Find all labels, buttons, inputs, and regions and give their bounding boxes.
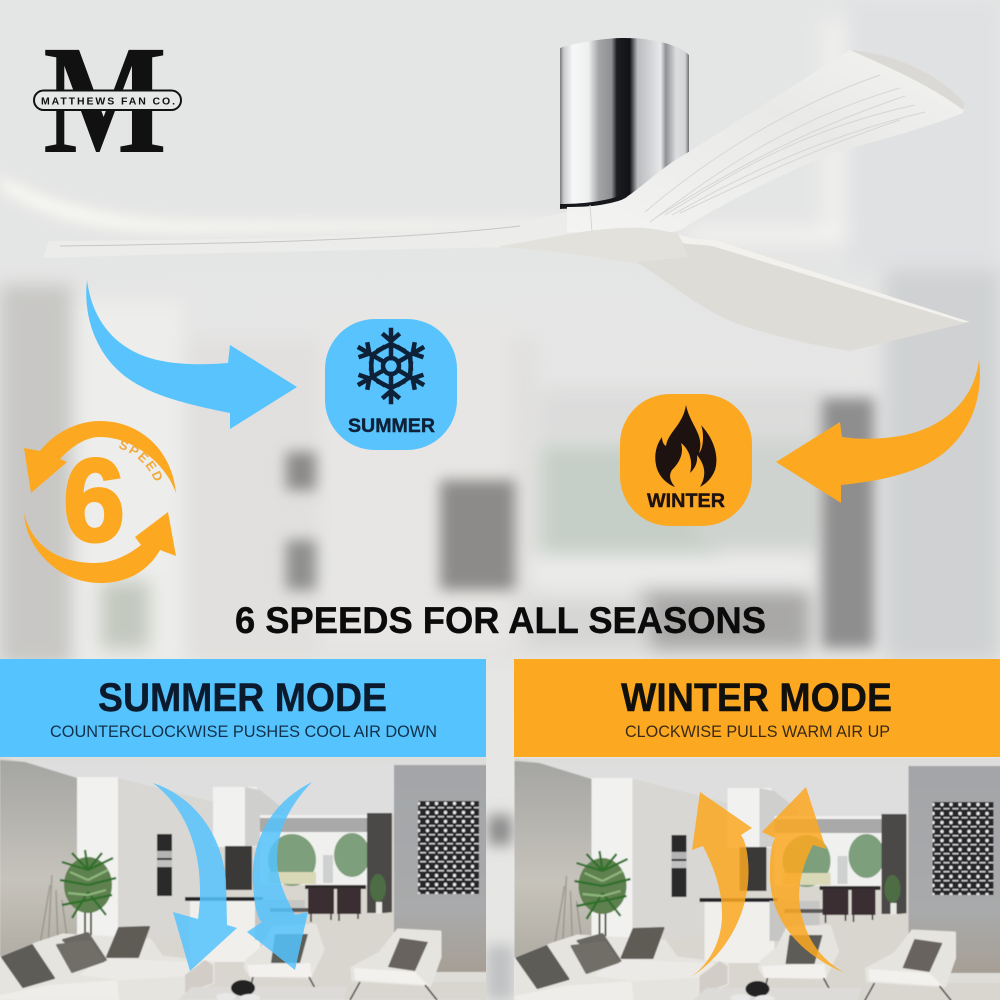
arrow: winter air to badge [776, 360, 980, 503]
speed label: SPEED [119, 440, 162, 480]
photo: summer room with airflow [0, 757, 504, 1000]
photo: winter room with airflow [514, 758, 1000, 1000]
circular arrow: top [24, 421, 176, 493]
airflow arrow: summer left [153, 783, 237, 971]
panel: winter mode [514, 659, 1000, 757]
logo: Matthews Fan Co.: MATTHEWS FAN CO. [41, 96, 175, 108]
logo: Matthews Fan Co.: M [43, 13, 167, 186]
airflow arrow: winter left [688, 792, 752, 979]
fan blade: left [43, 208, 620, 258]
airflow arrow: winter right [762, 787, 845, 973]
badge label: summer: SUMMER [348, 416, 435, 437]
subheading: winter mode: CLOCKWISE PULLS WARM AIR UP [625, 722, 890, 741]
badge: summer [325, 319, 457, 450]
heading: winter mode: WINTER MODE [621, 676, 892, 720]
ceiling fan [43, 38, 970, 351]
fan blade: rear [620, 225, 970, 351]
fan motor housing [560, 38, 689, 208]
badge: winter [620, 394, 752, 526]
title: 6 SPEEDS FOR ALL SEASONS [235, 600, 766, 641]
arrow: summer air to badge [86, 280, 297, 429]
numeral 6: 6 [63, 435, 125, 567]
panel: summer mode [0, 659, 486, 757]
badge label: winter: WINTER [647, 491, 725, 512]
hub shadow section [500, 228, 688, 263]
blade wood grain [60, 75, 925, 246]
subheading: summer mode: COUNTERCLOCKWISE PUSHES COOL AIR DOWN [50, 722, 437, 741]
airflow arrow: summer right [247, 782, 312, 970]
circular arrow: bottom [24, 512, 176, 583]
icon: 6 speed badge [24, 421, 176, 583]
heading: summer mode: SUMMER MODE [98, 676, 387, 720]
fan blade: upper right [567, 50, 965, 238]
icon: flame [655, 405, 716, 487]
icon: snowflake [354, 330, 428, 402]
